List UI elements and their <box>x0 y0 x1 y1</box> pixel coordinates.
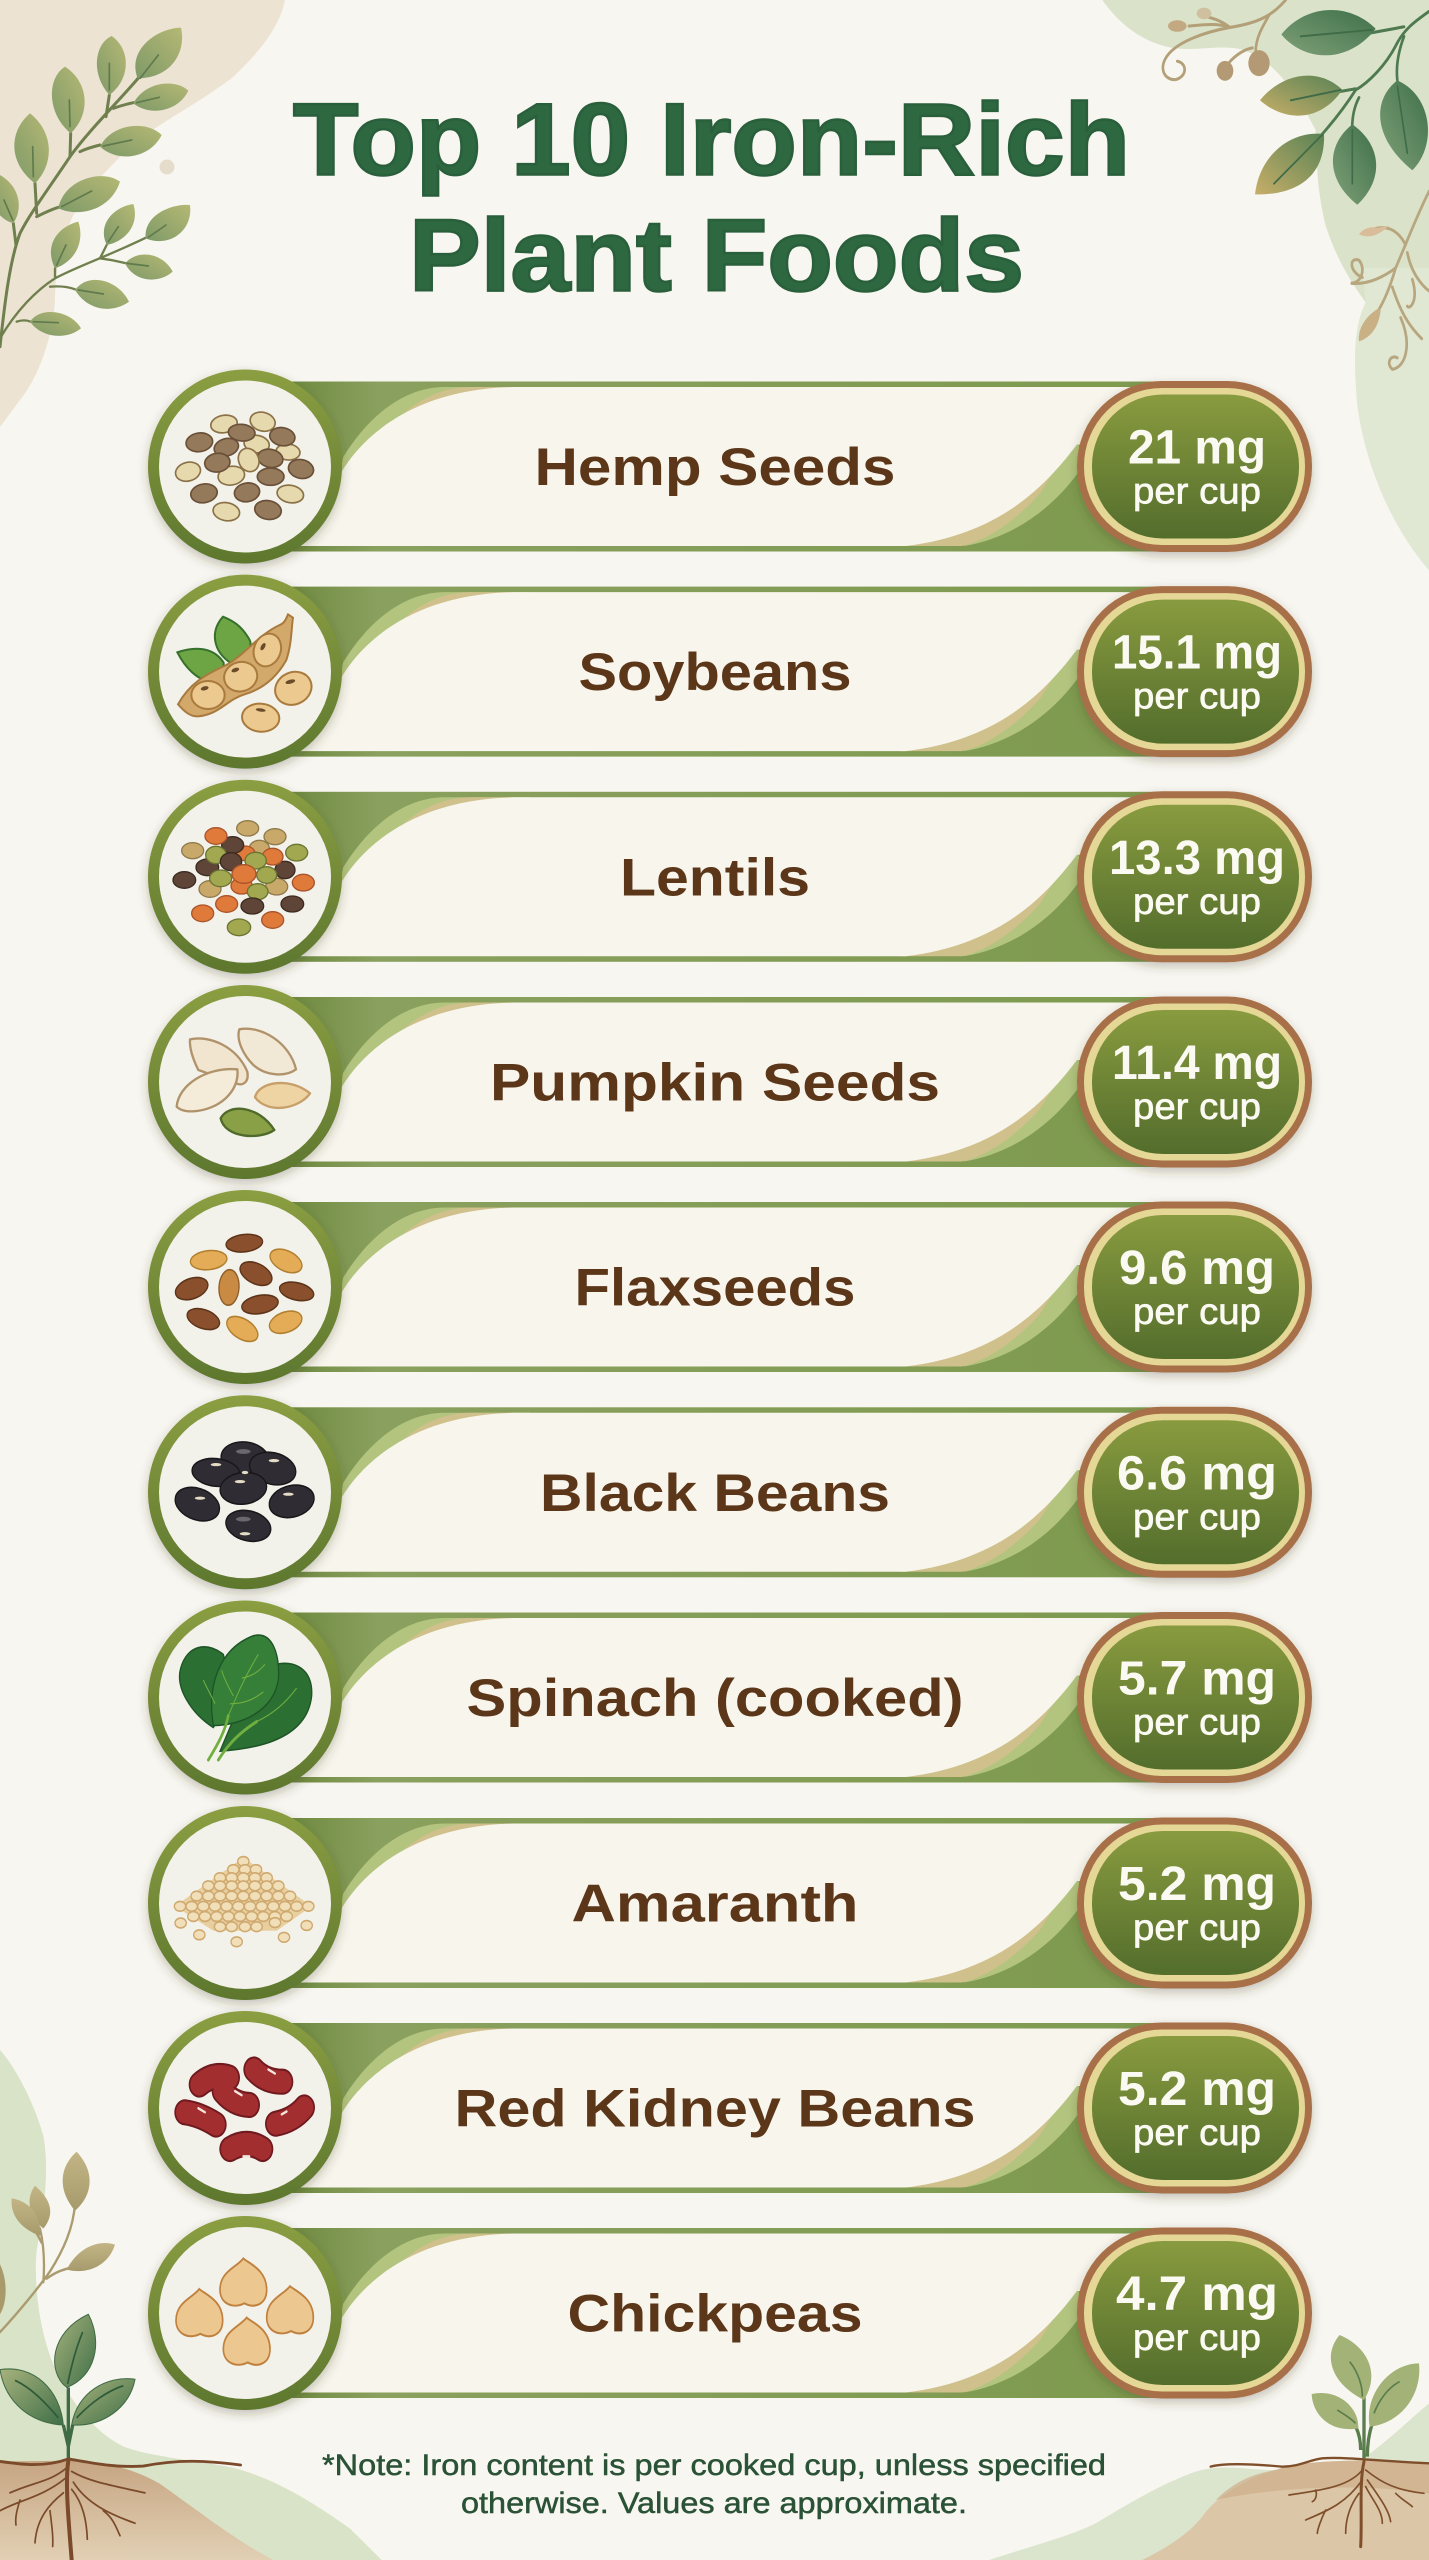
row 7: Spinach <box>148 1600 1312 1794</box>
title: Plant Foods <box>409 199 1024 313</box>
iron value pill: 6.6 mg <box>1117 1447 1277 1500</box>
name: Amaranth <box>572 1874 858 1934</box>
banner <box>290 1407 1165 1577</box>
food badge <box>148 1806 342 2000</box>
name: Pumpkin Seeds <box>490 1054 940 1112</box>
row 6: Black Beans <box>148 1395 1312 1589</box>
iron value pill: per cup <box>1133 470 1261 512</box>
iron value pill: 5.7 mg <box>1118 1652 1276 1706</box>
iron value pill <box>1077 2022 1312 2194</box>
corner art: bottom-left plant and soil <box>0 2050 382 2560</box>
row 3: Lentils <box>148 780 1312 974</box>
food badge <box>148 1600 342 1794</box>
banner <box>290 382 1165 552</box>
footnote <box>322 2449 1106 2520</box>
iron value pill: 11.4 mg <box>1112 1037 1282 1090</box>
icon: flaxseeds <box>173 1233 315 1347</box>
row 1: Hemp Seeds <box>148 370 1312 564</box>
iron value pill: per cup <box>1133 881 1261 922</box>
title: Top 10 Iron-Rich <box>293 82 1130 196</box>
iron value pill: 9.6 mg <box>1119 1242 1275 1295</box>
iron value pill: 5.2 mg <box>1118 1858 1276 1911</box>
iron value pill: per cup <box>1133 2317 1261 2358</box>
iron value pill: per cup <box>1133 1702 1261 1742</box>
row 2: Soybeans <box>148 575 1312 769</box>
food badge <box>148 780 342 974</box>
banner <box>290 792 1165 962</box>
iron value pill: 13.3 mg <box>1109 832 1285 885</box>
iron value pill <box>1077 1202 1312 1372</box>
food badge <box>148 575 342 769</box>
row 5: Flaxseeds <box>148 1190 1312 1384</box>
name: Lentils <box>620 848 810 907</box>
food badge <box>148 1190 342 1384</box>
banner <box>290 1612 1165 1782</box>
footnote: otherwise. Values are approximate. <box>461 2487 967 2520</box>
iron value pill: per cup <box>1133 1086 1261 1127</box>
iron value pill: per cup <box>1133 1907 1261 1948</box>
iron value pill <box>1077 2228 1312 2398</box>
name: Soybeans <box>578 643 852 702</box>
iron value pill: per cup <box>1133 1291 1261 1332</box>
name: Hemp Seeds <box>534 438 896 497</box>
iron value pill <box>1077 1407 1312 1578</box>
icon: red kidney beans <box>185 2069 304 2156</box>
name: Black Beans <box>540 1464 890 1523</box>
iron value pill <box>1077 381 1312 552</box>
icon: pumpkin seeds <box>177 1029 310 1136</box>
banner <box>290 587 1165 757</box>
food badge <box>148 2011 342 2205</box>
iron value pill: per cup <box>1133 676 1261 717</box>
name: Red Kidney Beans <box>454 2080 976 2138</box>
icon: spinach <box>180 1635 312 1760</box>
food badge <box>148 985 342 1179</box>
iron value pill <box>1077 791 1312 962</box>
blob: top-left tan <box>0 0 285 427</box>
iron value pill <box>1077 1818 1312 1988</box>
branch: top-left leaves <box>0 28 190 347</box>
row 10: Chickpeas <box>148 2216 1312 2410</box>
iron value pill <box>1077 1612 1312 1783</box>
banner <box>290 1202 1165 1372</box>
banner <box>290 1818 1165 1988</box>
title <box>293 82 1130 313</box>
icon: hemp seeds <box>173 409 315 523</box>
iron value pill: per cup <box>1133 1496 1261 1537</box>
iron value pill: 4.7 mg <box>1116 2268 1278 2321</box>
banner <box>290 2228 1165 2398</box>
footnote: *Note: Iron content is per cooked cup, unless specified <box>322 2449 1106 2482</box>
icon: amaranth <box>174 1857 314 1947</box>
food badge <box>148 2216 342 2410</box>
iron value pill: 15.1 mg <box>1112 627 1282 680</box>
name: Flaxseeds <box>574 1258 856 1318</box>
food badge <box>148 370 342 564</box>
name: Spinach (cooked) <box>466 1669 964 1728</box>
corner art: bottom-right plant and soil <box>989 2335 1429 2560</box>
iron value pill: per cup <box>1133 2112 1261 2153</box>
banner <box>290 997 1165 1167</box>
blob: top-right green <box>1102 0 1429 570</box>
row 4: Pumpkin Seeds <box>148 985 1312 1179</box>
row 9: Red Kidney Beans <box>148 2011 1312 2205</box>
name: Chickpeas <box>568 2284 862 2344</box>
sprigs and leaves: top-right <box>1163 0 1429 341</box>
icon: lentils <box>173 821 314 936</box>
iron value pill: 21 mg <box>1128 422 1266 474</box>
row 8: Amaranth <box>148 1806 1312 2000</box>
banner <box>290 2023 1165 2193</box>
icon: soybeans <box>177 614 317 733</box>
iron value pill <box>1077 586 1312 757</box>
iron value pill: 5.2 mg <box>1118 2063 1276 2116</box>
iron value pill <box>1077 996 1312 1168</box>
food badge <box>148 1395 342 1589</box>
icon: black beans <box>172 1440 316 1545</box>
icon: chickpeas <box>176 2258 313 2365</box>
dot <box>160 160 174 174</box>
